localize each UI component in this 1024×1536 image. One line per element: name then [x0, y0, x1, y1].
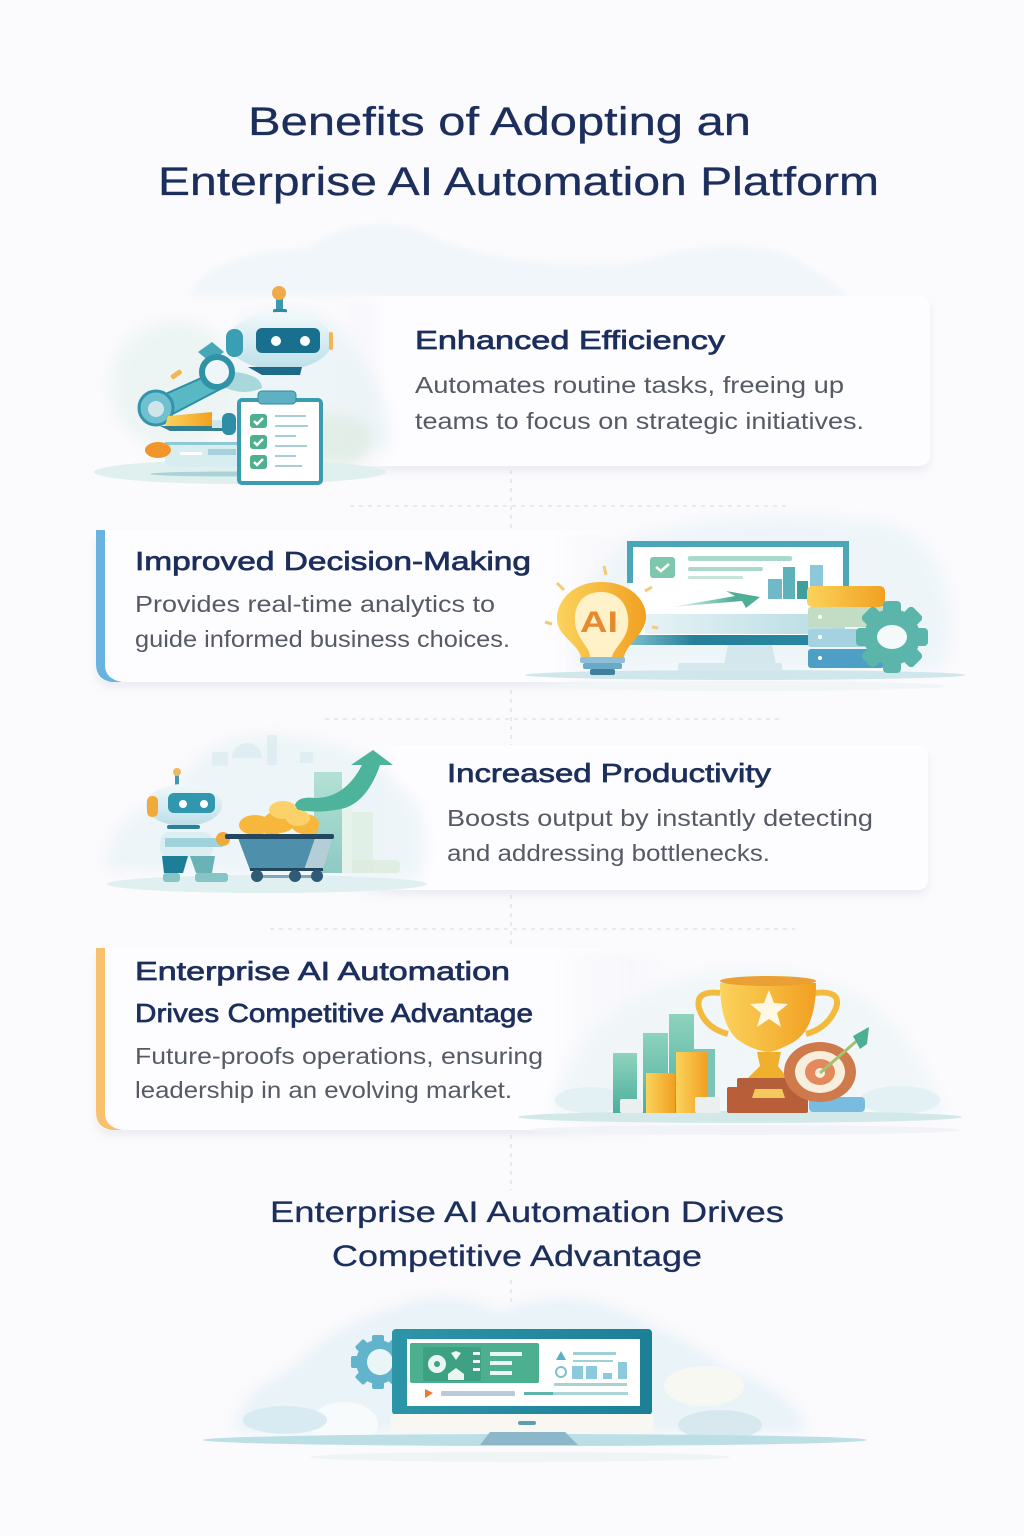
card 3 body text: Boosts output by instantly detecting	[447, 805, 873, 831]
card 4 body text: leadership in an evolving market.	[135, 1077, 512, 1103]
card 4 body text: Future-proofs operations, ensuring	[135, 1043, 543, 1069]
card 4 heading: Enterprise AI Automation	[135, 956, 510, 986]
icon: trophy, bars and target	[518, 970, 962, 1135]
icon: AI bulb, monitor, servers and gear	[525, 515, 965, 691]
panel: card 4 competitive advantage	[96, 948, 666, 1130]
card 4 accent bar	[96, 948, 122, 1130]
panel: card 1 enhanced efficiency	[340, 296, 930, 466]
card 2 body text: guide informed business choices.	[135, 626, 510, 652]
icon: AI bulb, monitor, servers and gear: AI	[580, 606, 618, 639]
card 3 body text: and addressing bottlenecks.	[447, 840, 770, 866]
panel: cloud backdrop above card 1	[190, 224, 845, 296]
panel: card 2 improved decision-making	[96, 530, 666, 682]
card 1 body text: Automates routine tasks, freeing up	[415, 372, 844, 398]
card 4 heading: Drives Competitive Advantage	[135, 998, 533, 1028]
closing statement: Competitive Advantage	[332, 1240, 702, 1273]
panel: card 3 increased productivity	[350, 745, 928, 890]
card 4 heading	[135, 956, 533, 1028]
card 3 heading: Increased Productivity	[447, 758, 771, 788]
card 2 body text: Provides real-time analytics to	[135, 591, 495, 617]
card 1 body text	[415, 372, 864, 434]
closing statement	[270, 1196, 784, 1273]
icon: robot pushing cart with growth arrow	[105, 735, 427, 893]
title: Enterprise AI Automation Platform	[158, 160, 879, 204]
title	[158, 100, 879, 204]
card 2 heading: Improved Decision-Making	[135, 546, 531, 576]
card 3 body text	[447, 805, 873, 866]
card 1 heading: Enhanced Efficiency	[415, 325, 725, 355]
icon: laptop dashboard with clouds	[203, 1296, 867, 1462]
card 2 accent bar	[96, 530, 122, 682]
title: Benefits of Adopting an	[248, 100, 751, 144]
icon: robot arm with checklist	[94, 286, 390, 484]
card 1 body text: teams to focus on strategic initiatives.	[415, 408, 864, 434]
card 2 body text	[135, 591, 510, 652]
card 4 body text	[135, 1043, 543, 1103]
closing statement: Enterprise AI Automation Drives	[270, 1196, 784, 1229]
